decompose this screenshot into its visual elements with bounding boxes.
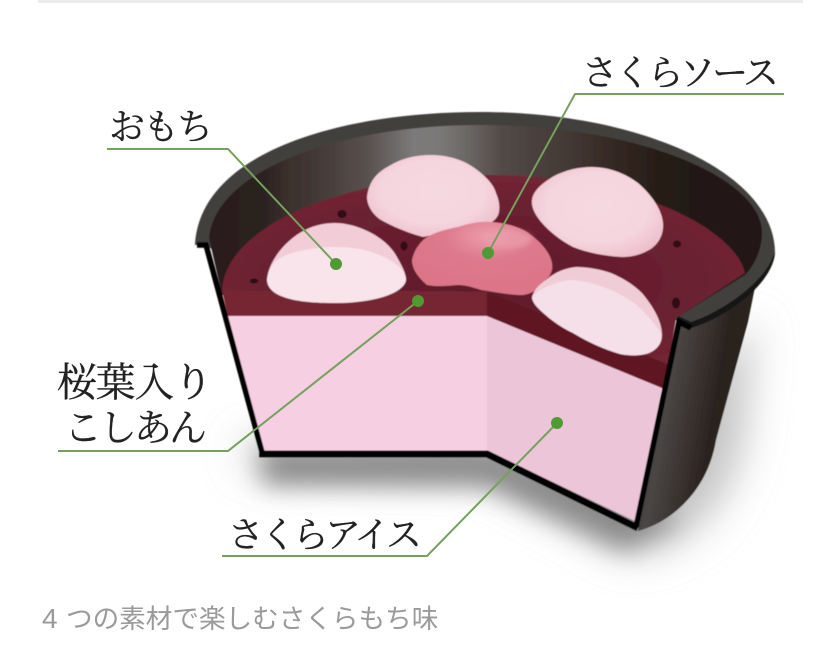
callout: さくらアイス xyxy=(222,417,563,556)
mochi right back xyxy=(532,167,663,257)
container cut edge: sides xyxy=(197,245,691,527)
container cut edge: bottom xyxy=(259,454,638,528)
callout: 桜葉入りこしあん xyxy=(57,295,424,451)
anko beans xyxy=(250,210,681,308)
ice cream right face xyxy=(487,316,662,521)
rim underside xyxy=(676,253,775,328)
caption: つの素材で楽しむさくらもち味 xyxy=(66,604,438,634)
callout: 桜葉入りこしあん: 桜葉入り xyxy=(57,360,213,405)
callout: さくらアイス: さくらアイス xyxy=(228,515,422,555)
mochi cut left xyxy=(267,223,406,303)
mochi back xyxy=(367,155,499,237)
illustration: cutaway ice cream cup xyxy=(195,112,775,555)
top bar xyxy=(38,0,803,3)
outer right wall xyxy=(638,282,756,531)
ice cream left face xyxy=(228,316,487,451)
anko surface xyxy=(222,175,745,367)
caption: 4 xyxy=(42,603,58,634)
anko cut face right xyxy=(487,292,672,389)
callout: さくらソース: さくらソース xyxy=(582,53,779,93)
sakura sauce xyxy=(412,222,552,295)
callout: おもち xyxy=(107,107,342,270)
inner wall xyxy=(209,125,762,318)
mochi cut right xyxy=(532,267,662,355)
callout: さくらソース xyxy=(482,53,784,259)
callout: 桜葉入りこしあん: こしあん xyxy=(64,408,207,450)
anko cut face left xyxy=(222,290,487,317)
rim xyxy=(195,112,775,328)
soft halo shadow xyxy=(245,320,755,555)
callout: おもち: おもち xyxy=(109,107,213,147)
cast shadow xyxy=(262,445,680,550)
